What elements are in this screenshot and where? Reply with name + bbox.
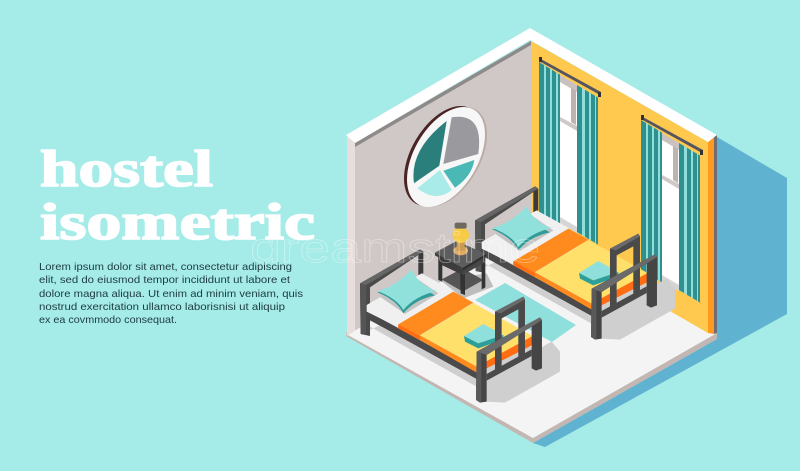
wall cornice	[346, 28, 717, 143]
left wall	[347, 41, 531, 336]
front bed	[360, 249, 560, 403]
lamp	[452, 223, 469, 255]
room shadow	[533, 137, 787, 447]
body text: nostrud exercitation ullamco laborisnisi ut aliquip	[39, 301, 285, 313]
window pane: light	[417, 170, 452, 196]
floor	[346, 228, 717, 443]
watermark: dreamstime	[250, 224, 540, 271]
back bed	[475, 186, 675, 340]
round window	[404, 89, 487, 224]
window with curtains 2	[641, 115, 703, 303]
rug	[475, 283, 576, 342]
body text: Lorem ipsum dolor sit amet, consectetur adipiscing	[39, 261, 292, 273]
right wall	[531, 41, 717, 334]
body text: elit, sed do eiusmod tempor incididunt ut labore et	[39, 274, 290, 286]
window pane: dark teal	[413, 121, 447, 183]
window with curtains 1	[539, 57, 601, 245]
window pane: grey	[443, 117, 479, 164]
title: hostel	[40, 141, 213, 198]
body text: dolore magna aliqua. Ut enim ad minim veniam, quis	[39, 288, 303, 300]
title: isometric	[40, 194, 315, 251]
room	[346, 28, 717, 443]
body text: ex ea covmmodo consequat.	[39, 314, 177, 326]
window pane: teal	[443, 160, 474, 188]
body text	[39, 261, 303, 326]
title	[40, 141, 315, 251]
nightstand	[435, 223, 493, 298]
